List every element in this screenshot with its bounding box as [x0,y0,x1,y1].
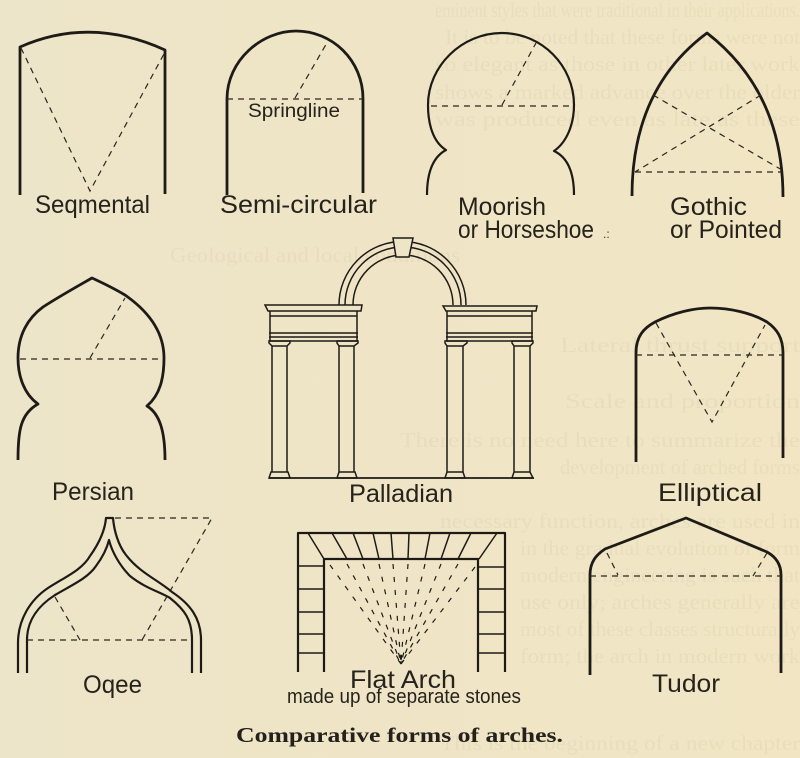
text: most of these classes structurally [520,617,800,641]
label: Palladian: Palladian [349,480,453,508]
label: Semi-circular: Semi-circular [220,191,377,219]
text: form; the arch in modern work [520,644,800,668]
label: Ogee: Oqee [83,671,142,699]
arch: ogee [18,518,212,699]
text: so elegant as those in other later work [435,52,800,76]
label: Gothic or Pointed: Gothic [670,193,747,221]
arch: flat arch [287,533,521,708]
arch: Gothic or pointed: or Pointed [670,216,782,244]
arch: Moorish or horseshoe: .: [603,227,610,241]
text: modern engineering is such that [520,563,800,587]
text: in the gradual evolution of form [520,536,800,560]
arch: Gothic or pointed [632,33,783,244]
text: Lateral thrust support [560,333,800,357]
label: Segmental: Seqmental [35,191,150,219]
arch: semi-circular [220,31,377,219]
label: Moorish or Horseshoe: Moorish [458,193,546,221]
text: It is to be noted that these forms were not [445,25,800,49]
arch: elliptical [636,308,783,507]
text: was produced even as late as these [435,107,800,131]
arch: Moorish or horseshoe: or Horseshoe [458,216,594,244]
label: springline: Springline [248,101,340,122]
text: development of arched forms [560,455,800,479]
label: made up of separate stones: made up of separate stones [287,686,521,708]
text: Geological and local conditions [170,243,460,267]
label: Flat Arch: Flat Arch [350,666,456,694]
arch: Tudor [590,518,781,698]
text: Scale and proportion [565,389,800,413]
text: use only; arches generally are [520,590,800,614]
label: Tudor: Tudor [652,670,720,698]
arch: segmental [20,32,165,219]
arch: Persian [18,278,165,506]
text: There is no need here to summarize the [400,428,800,452]
text: This is the beginning of a new chapter [440,731,800,755]
arch: Moorish or horseshoe [427,33,610,244]
text: necessary function, arches are used in [440,509,800,533]
label: Elliptical: Elliptical [658,479,762,507]
text: shows a marked advance over the older [435,80,800,104]
caption: Comparative forms of arches. [236,723,563,747]
label: Persian: Persian [52,478,134,506]
arch: Palladian [265,238,537,508]
